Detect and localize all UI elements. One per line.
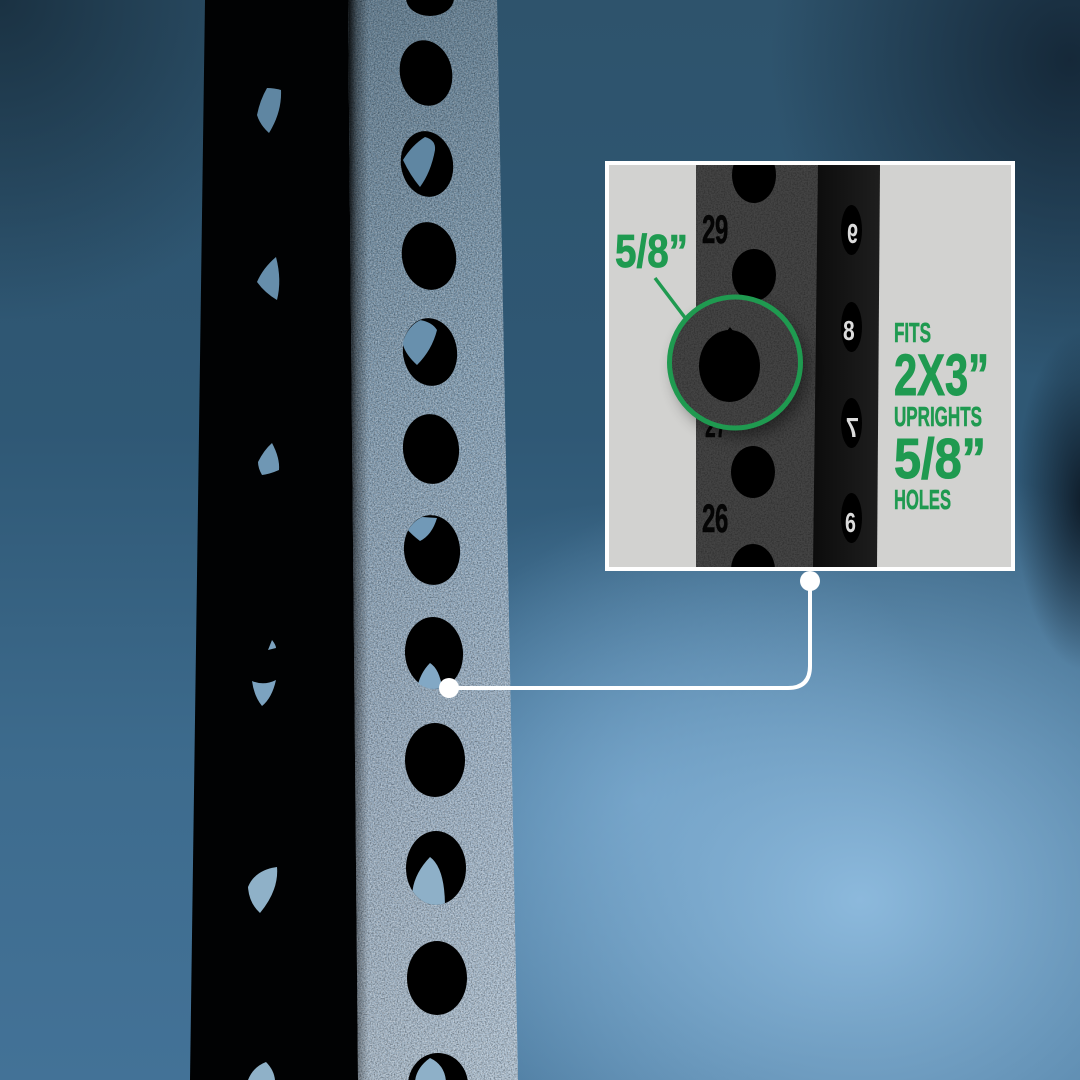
inset stamped numbers: 29: [702, 207, 728, 251]
column: dark side face: [190, 0, 360, 1080]
connector dot on hole: [439, 678, 459, 698]
light wedges through side holes: [248, 88, 281, 1080]
label: hole size: 5/8”: [615, 225, 688, 277]
inset stamped numbers: [702, 207, 728, 540]
spec text block: [894, 317, 989, 515]
spec text block: 2X3”: [894, 343, 989, 408]
spec text block: UPRIGHTS: [894, 401, 982, 432]
inset stamped numbers: 26: [702, 496, 728, 540]
inset side hole numbers: 6: [845, 508, 856, 539]
connector dot at callout: [800, 571, 820, 591]
connector line from hole to callout: [439, 571, 820, 698]
inset side hole numbers: 8: [843, 316, 855, 347]
magnified hole circle: [670, 297, 800, 428]
spec text block: 5/8”: [894, 427, 986, 491]
front face holes: [394, 0, 468, 1080]
inset stamped numbers: 27: [705, 408, 727, 444]
callout panel: [607, 147, 1013, 596]
inset side hole numbers: [844, 224, 858, 532]
spec text block: HOLES: [894, 484, 951, 515]
magnified circle shadow: [675, 304, 807, 436]
inset side holes: [841, 205, 862, 543]
inset front holes: [731, 165, 776, 567]
pointer line: [655, 278, 686, 319]
light wedges through front holes: [403, 137, 446, 1080]
spec text block: FITS: [894, 317, 931, 348]
inset upright photo: [696, 165, 880, 567]
upright column photo: [190, 0, 518, 1080]
inset side hole numbers: 9: [847, 219, 858, 250]
column: textured front face: [348, 0, 518, 1080]
inset side hole numbers: 7: [846, 411, 859, 443]
